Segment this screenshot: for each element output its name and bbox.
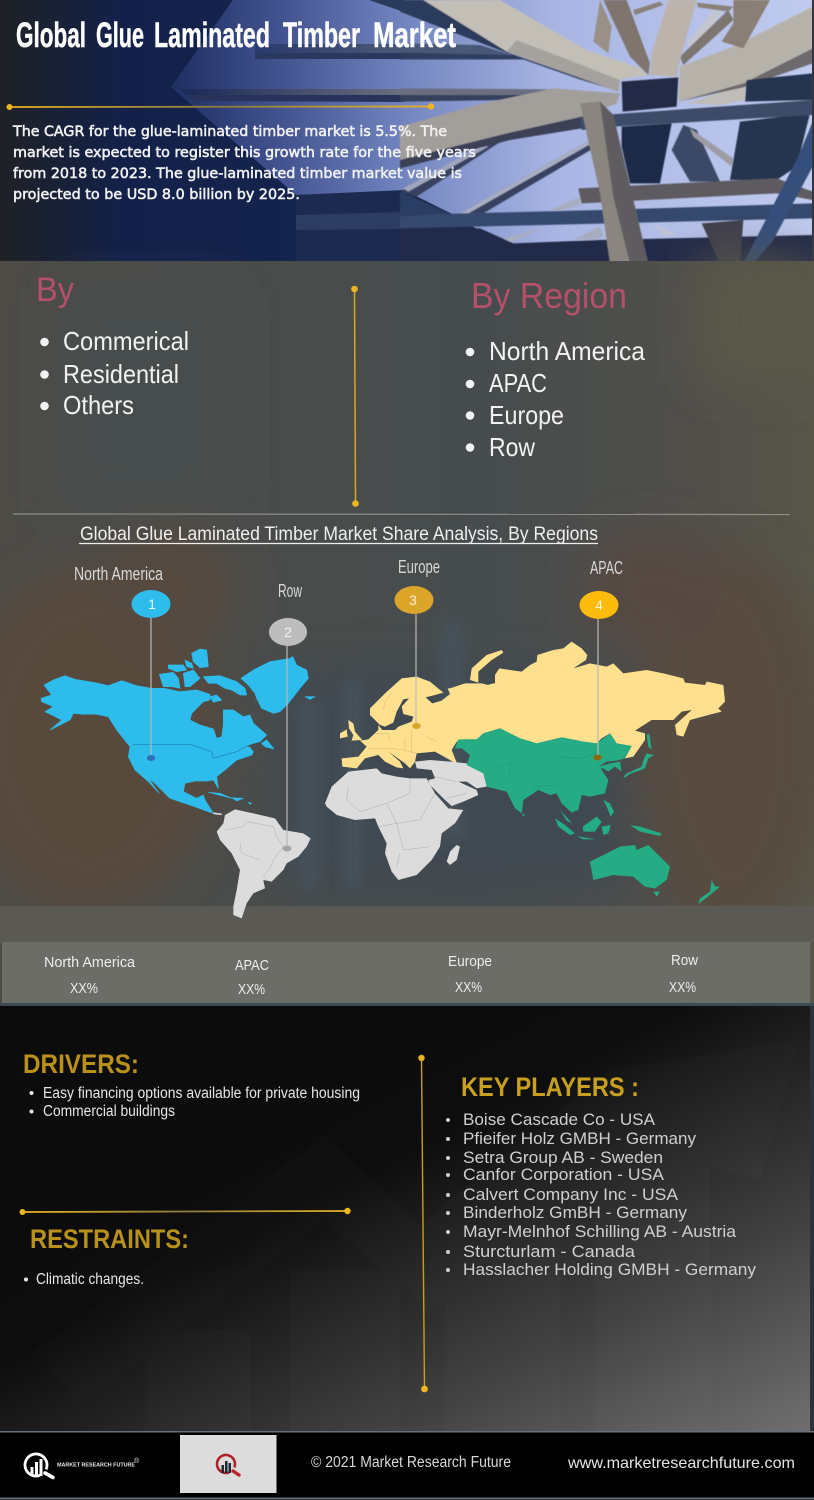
gold divider: vertical key players <box>418 1055 428 1392</box>
pin 4: APAC <box>580 558 623 760</box>
panel: by segment <box>36 271 189 420</box>
key players list: Setra Group AB - Sweden <box>463 1149 663 1167</box>
website: www.marketresearchfuture.com <box>567 1455 795 1472</box>
panel: drivers <box>23 1049 360 1120</box>
logo: white Market Research Future: ® <box>134 1457 140 1465</box>
gold divider: header <box>6 103 434 110</box>
pin 3: Europe: Europe <box>398 557 440 577</box>
share: North America: North America <box>44 954 136 971</box>
intro paragraph: projected to be USD 8.0 billion by 2025. <box>13 187 300 203</box>
key players list: Sturcturlam - Canada <box>463 1243 636 1261</box>
key players list: Hasslacher Holding GMBH - Germany <box>463 1261 757 1279</box>
pin 3: Europe <box>394 557 440 729</box>
main title: Glue <box>96 16 144 55</box>
segment list: Commerical <box>63 326 189 356</box>
share: Row: Row <box>671 952 698 969</box>
copyright: © 2021 Market Research Future <box>311 1454 511 1471</box>
drivers list <box>30 1085 360 1120</box>
pin 1: North America: 1 <box>148 596 156 612</box>
world map <box>41 642 725 918</box>
share: Europe: XX% <box>455 979 482 996</box>
region list: Europe <box>489 400 564 430</box>
pin 1: North America <box>74 564 170 761</box>
map: Southeast Asia and Oceania <box>555 800 720 904</box>
share: APAC: APAC <box>235 957 269 974</box>
logo: white Market Research Future <box>22 1451 140 1479</box>
middle section background <box>0 261 814 1006</box>
region list: Row <box>489 432 535 462</box>
key players list: Binderholz GmBH - Germany <box>463 1204 688 1222</box>
share: North America: XX% <box>70 980 98 997</box>
logo box <box>180 1435 276 1493</box>
footer bar <box>0 1431 814 1500</box>
intro paragraph: from 2018 to 2023. The glue-laminated timber market value is <box>13 166 462 182</box>
panel: key players <box>446 1072 757 1279</box>
pin 2: Row <box>269 581 307 852</box>
share: Europe <box>448 953 492 996</box>
pin 4: APAC: APAC <box>590 558 623 578</box>
map: Africa and Middle East <box>325 760 487 880</box>
share: APAC <box>235 957 269 998</box>
main title: Timber <box>283 16 360 55</box>
share: North America <box>44 954 136 997</box>
share: Europe: Europe <box>448 953 492 970</box>
main title: Laminated <box>154 16 270 55</box>
region list: North America <box>489 336 645 366</box>
share: Row <box>669 952 698 996</box>
restraints list: Climatic changes. <box>36 1271 144 1288</box>
map: Europe <box>340 677 505 768</box>
lower dark section background <box>0 1006 814 1431</box>
heading: By Region: By Region <box>471 275 627 316</box>
segment list <box>40 326 189 420</box>
map: South America <box>213 809 311 918</box>
map: Asia <box>455 728 654 817</box>
key players list: Canfor Corporation - USA <box>463 1166 664 1184</box>
pin 1: North America: North America <box>74 564 164 584</box>
gold divider: vertical between lists <box>351 286 359 507</box>
key players list: Boise Cascade Co - USA <box>463 1111 655 1129</box>
share table <box>0 942 814 1006</box>
intro paragraph: The CAGR for the glue-laminated timber market is 5.5%. The <box>12 124 447 140</box>
segment list: Residential <box>63 359 179 389</box>
key players list <box>446 1111 757 1279</box>
panel: restraints <box>24 1224 189 1288</box>
main title: Global <box>16 16 86 55</box>
heading: key players: KEY PLAYERS : <box>461 1072 639 1102</box>
panel: by region <box>466 275 645 462</box>
main title: Market <box>373 16 456 55</box>
key players list: Mayr-Melnhof Schilling AB - Austria <box>463 1223 737 1241</box>
chart title: Global Glue Laminated Timber Market Share Analysis, By Regions <box>80 524 598 545</box>
heading: restraints: RESTRAINTS: <box>30 1224 189 1254</box>
drivers list: Easy financing options available for private housing <box>43 1085 360 1102</box>
pin 2: Row: Row <box>278 581 303 601</box>
pin 4: APAC: 4 <box>595 597 603 613</box>
intro paragraph: market is expected to register this growth rate for the five years <box>13 145 476 161</box>
map: North America <box>41 649 315 813</box>
region list <box>466 336 645 462</box>
gold divider: drivers and restraints <box>20 1208 351 1215</box>
share: Row: XX% <box>669 979 696 996</box>
intro paragraph <box>12 124 476 203</box>
segment list: Others <box>63 390 134 420</box>
heading: drivers: DRIVERS: <box>23 1049 139 1079</box>
header photo: timber roof structure <box>0 0 814 265</box>
heading: By: By <box>36 271 74 309</box>
logo: white Market Research Future: MARKET RESEARCH FUTURE <box>57 1462 135 1468</box>
key players list: Calvert Company Inc - USA <box>463 1186 678 1204</box>
share: APAC: XX% <box>238 981 265 998</box>
pin 2: Row: 2 <box>284 624 292 640</box>
map: Russia <box>450 642 725 758</box>
key players list: Pfieifer Holz GMBH - Germany <box>463 1130 697 1148</box>
region list: APAC <box>489 368 547 398</box>
pin 3: Europe: 3 <box>409 592 417 608</box>
main title <box>16 16 456 55</box>
drivers list: Commercial buildings <box>43 1103 175 1120</box>
